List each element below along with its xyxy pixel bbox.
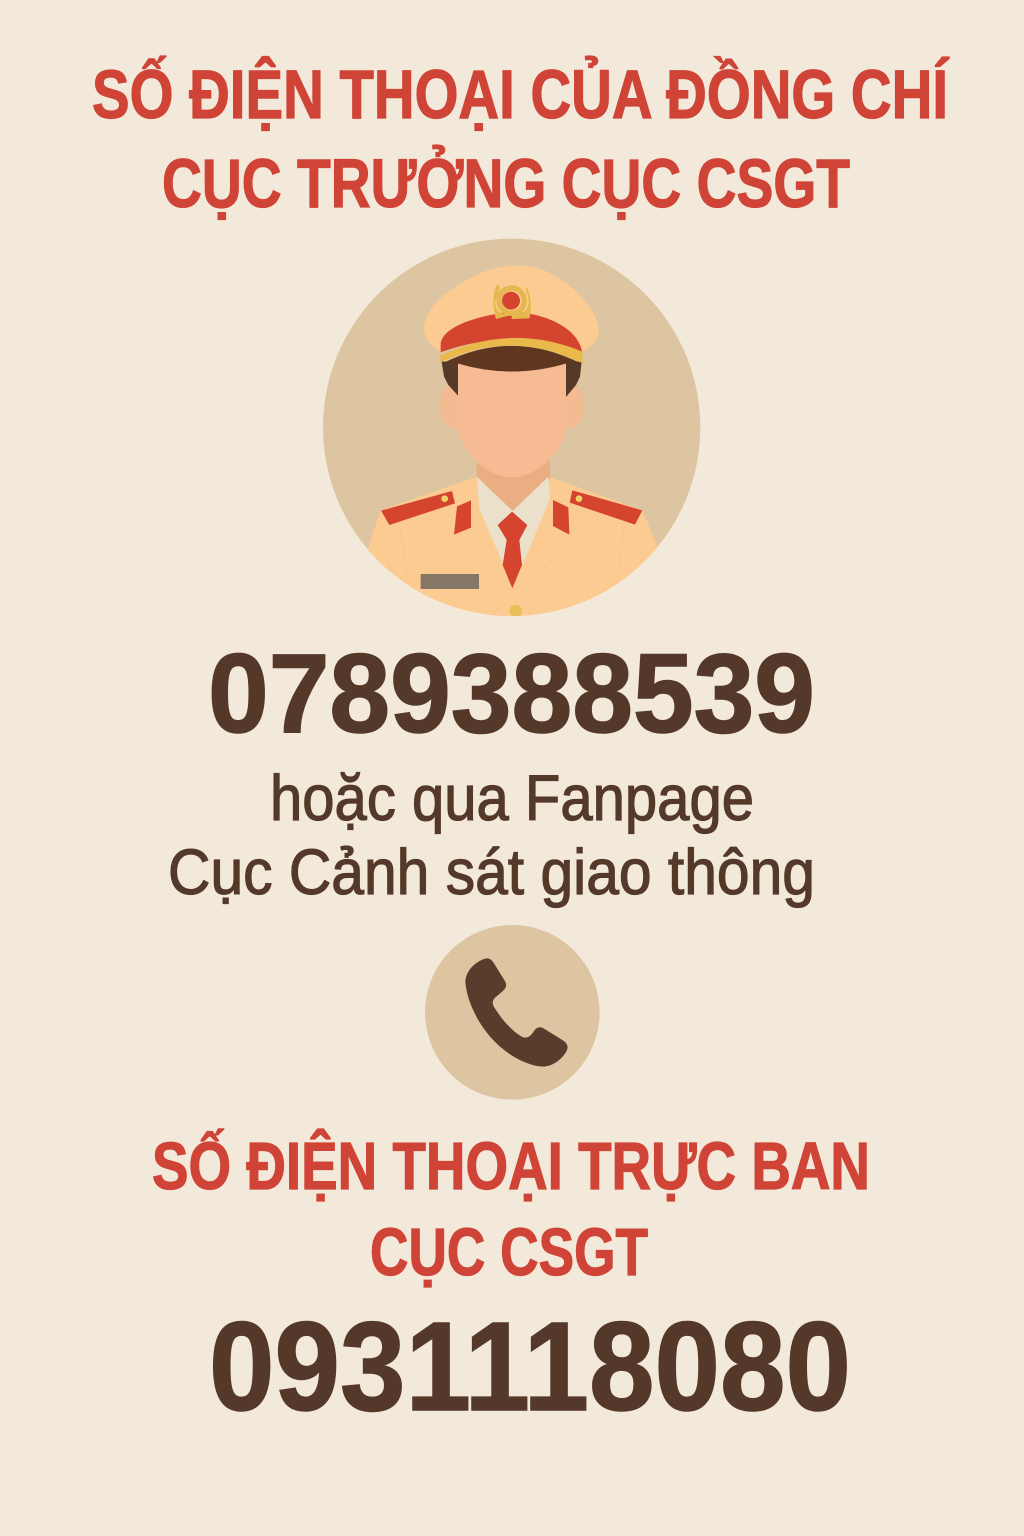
neck [476, 459, 550, 511]
cap badge [494, 284, 531, 319]
cap crown [424, 266, 599, 352]
text block: fanpage note: Cục Cảnh sát giao thông [168, 836, 815, 908]
hair top [443, 346, 581, 372]
shirt collar [477, 477, 550, 568]
phone number: director: 0789388539 [208, 631, 815, 756]
icon: telephone handset [425, 925, 600, 1100]
left shoulder board [381, 491, 455, 525]
text block: fanpage note [168, 762, 815, 908]
red tie [498, 512, 527, 588]
title: director's phone number [92, 56, 949, 222]
right shoulder board [570, 490, 642, 525]
collar tabs [454, 500, 471, 535]
uniform seams [400, 528, 624, 590]
hair right side [564, 362, 582, 397]
ears [440, 384, 467, 428]
button [509, 605, 522, 617]
heading: duty officer phone number: CỤC CSGT [370, 1215, 648, 1290]
text block: fanpage note: hoặc qua Fanpage [270, 762, 754, 834]
name tag [421, 574, 479, 589]
heading: duty officer phone number: SỐ ĐIỆN THOẠI TRỰC BAN [152, 1128, 870, 1204]
phone number: duty desk: 0931118080 [209, 1296, 851, 1437]
title: director's phone number: CỤC TRƯỞNG CỤC CSGT [162, 145, 850, 222]
hair left side [442, 362, 460, 396]
cap gold trim [440, 338, 583, 363]
cap red band [441, 312, 582, 352]
face [458, 364, 566, 477]
heading: duty officer phone number [152, 1128, 870, 1290]
uniform body [368, 477, 657, 622]
icon: traffic police officer portrait [323, 239, 700, 622]
